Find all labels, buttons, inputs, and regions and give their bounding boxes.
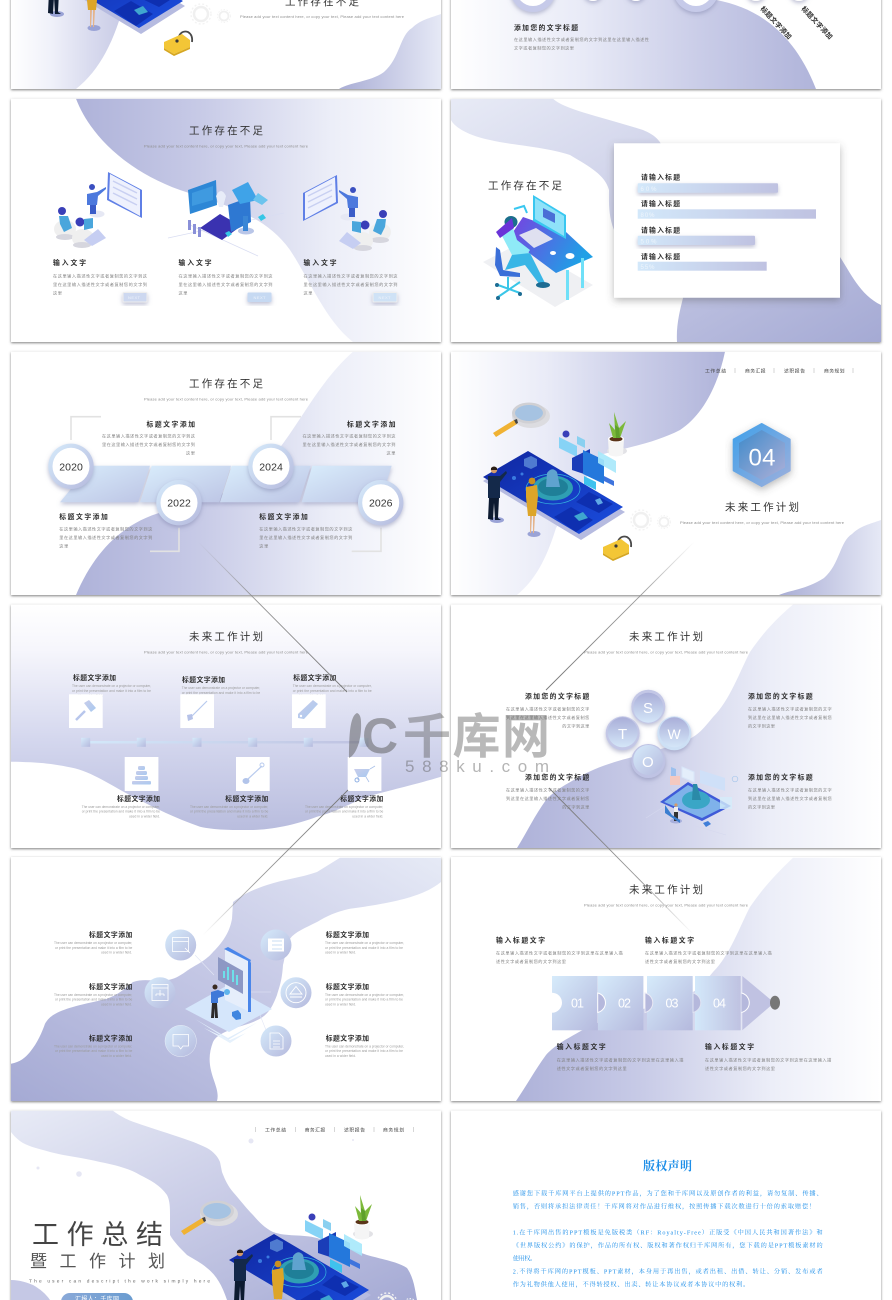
panel: slide circles and titles fragment <box>451 0 881 89</box>
text bottom left: 的文字到这里 <box>562 804 589 810</box>
button: NEXT: NEXT <box>254 295 266 300</box>
panel: slide hub with six icons <box>11 857 441 1101</box>
text: top left: 这里 <box>186 450 195 456</box>
item 4: cone <box>82 757 160 818</box>
icon: saw <box>298 700 318 719</box>
rotated label 2: 标题文字添加 <box>800 4 835 41</box>
text right 3: 标题文字添加 <box>326 1034 369 1042</box>
SWOT cluster: S <box>643 700 653 717</box>
item 6: wheelbarrow: The user can demonstrate on a projector or computer, <box>305 805 383 809</box>
text right 2 <box>325 982 404 1006</box>
item 3: saw: used in a wider field. <box>293 694 324 698</box>
column 2 text: 在这里输入描述性文字或者复制您的文字到这 <box>178 272 273 280</box>
text: top left: 在这里输入描述性文字或者复制您的文字到这 <box>102 432 196 440</box>
panel: slide 工作存在不足 three columns <box>11 99 441 342</box>
panel: slide chapter cover fragment <box>11 0 441 89</box>
text left 3: 标题文字添加 <box>89 1034 133 1042</box>
column 3 text: 在这里输入描述性文字或者复制您的文字到这 <box>304 272 398 280</box>
SWOT cluster: O <box>642 754 654 771</box>
pencil tip <box>742 976 780 1030</box>
item 4: cone: 标题文字添加 <box>117 794 160 803</box>
subtitle: Please add your text content here, or copy your text, Please add your text content here <box>584 903 749 908</box>
text left 1: used in a wider field. <box>101 950 132 954</box>
text left 2: 标题文字添加 <box>89 982 133 991</box>
hexagon badge 04 <box>734 424 790 486</box>
panel: copyright notice <box>451 1110 881 1300</box>
item 2: trowel: or print the presentation and make it into a film to be <box>182 691 260 695</box>
text right 1: 标题文字添加 <box>326 930 369 939</box>
text left 1: or print the presentation and make it into a film to be <box>55 946 132 950</box>
bar 80%: 80% <box>640 213 655 219</box>
illustration: rocket and dashboards <box>168 180 268 256</box>
text left 2: used in a wider field. <box>101 1002 132 1006</box>
panel: slide 工作存在不足 timeline <box>11 352 441 595</box>
text bottom left: 到这里在这里输入描述性文字或者复制您 <box>506 795 589 802</box>
navigation: 述职报告 <box>344 1126 365 1134</box>
item 4: cone: or print the presentation and make it into a film to be <box>82 810 160 814</box>
text top 2 <box>645 936 772 965</box>
panel: slide 未来工作计划 tools timeline <box>11 604 441 848</box>
navigation: 商务规划 <box>383 1126 404 1134</box>
text: top left: 里在这里输入描述性文字或者复制您的文字到 <box>102 441 195 448</box>
text top 1: 述性文字或者复制您的文字到这里 <box>496 958 566 965</box>
node 2020: 2020 <box>59 461 83 473</box>
item 3: saw: The user can demonstrate on a projector or computer, <box>293 684 372 688</box>
item 6: wheelbarrow: 标题文字添加 <box>340 794 384 803</box>
item 5: shovel: The user can demonstrate on a projector or computer, <box>190 805 268 809</box>
text top left: 的文字到这里 <box>562 722 589 730</box>
panel: slide 未来工作计划 SWOT <box>451 604 881 848</box>
text: top left <box>102 420 196 456</box>
item 1: roller: The user can demonstrate on a projector or computer, <box>72 684 151 688</box>
text: bottom left: 这里 <box>59 542 68 550</box>
item 5: shovel <box>190 757 270 818</box>
paragraph 3: 2.不得将千库网的PPT模板、PPT素材，本身用于再出售，或者出租、出借、转让、分销、发布或者 <box>513 1267 823 1275</box>
bar 60% <box>638 172 778 193</box>
SWOT cluster: W <box>668 726 682 742</box>
paragraph 1: 感谢您下载千库网平台上提供的PPT作品，为了您和千库网以及原创作者的利益，请勿复制、传播、 <box>513 1190 823 1198</box>
node 2024 <box>248 444 294 489</box>
bar 55% <box>638 252 767 271</box>
text block: 添加您的文字标题: 在这里输入描述性文字或者复制您的文字到这里在这里输入描述性 <box>514 36 649 43</box>
subtitle: Please add your text content here, or copy your text, Please add your text content here <box>144 144 309 148</box>
column 3 text: 输入文字 <box>304 258 337 267</box>
bar 80%: 请输入标题 <box>641 199 680 208</box>
column 2 text: 输入文字 <box>178 258 212 267</box>
column 2 text <box>178 258 273 302</box>
text: bottom left: 在这里输入描述性文字或者复制您的文字到这 <box>59 525 153 532</box>
item 1: roller: or print the presentation and make it into a film to be <box>72 689 151 693</box>
text top left: 添加您的文字标题 <box>525 692 590 700</box>
heading: 工作存在不足 <box>189 377 264 390</box>
navigation: 工作总结 <box>265 1126 286 1134</box>
watermark logo 千库网 588ku.com <box>349 708 550 776</box>
paragraph 2: 《世界版权公约》的保护，作品的所有权、版权和著作权归千库网所有，您下载的是PPT模板素材的 <box>513 1241 823 1249</box>
paragraph 2: 使用权。 <box>513 1254 536 1262</box>
icon: trowel <box>187 701 207 721</box>
item 2: trowel <box>180 675 260 728</box>
item 2: trowel: The user can demonstrate on a projector or computer, <box>182 686 260 690</box>
watermark logo 千库网 588ku.com: 千库网 <box>403 711 550 764</box>
item 6: wheelbarrow <box>305 757 384 818</box>
bar 55%: 请输入标题 <box>641 252 680 261</box>
brackets <box>71 417 381 551</box>
text: top right <box>302 420 396 456</box>
item 3: saw: or print the presentation and make it into a film to be <box>293 689 372 693</box>
bar 60%: 60% <box>640 187 657 193</box>
card: progress bars <box>614 143 840 298</box>
text left 2: or print the presentation and make it into a film to be <box>55 998 132 1002</box>
text bottom 2: 述性文字或者复制您的文字到这里 <box>705 1065 775 1072</box>
piece 04 <box>693 976 741 1030</box>
item 3: saw: 标题文字添加 <box>293 673 337 682</box>
text bottom right <box>748 772 832 810</box>
item 1: roller: used in a wider field. <box>72 694 103 698</box>
piece 01 <box>542 976 598 1030</box>
column 3 text <box>304 258 398 302</box>
text right 1 <box>325 930 404 954</box>
text top 2: 在这里输入描述性文字或者复制您的文字到这里在这里输入描 <box>645 950 772 956</box>
text bottom right: 在这里输入描述性文字或者复制您的文字 <box>748 786 832 794</box>
rotated label 1: 标题文字添加 <box>759 4 794 41</box>
text top left <box>506 692 590 730</box>
text right 2: The user can demonstrate on a projector or computer, <box>325 993 404 997</box>
text right 1: The user can demonstrate on a projector or computer, <box>325 941 404 945</box>
paragraph 1 <box>513 1190 823 1210</box>
paragraph 1: 销售，否则将承担法律责任！千库网将对作品进行维权，按照传播下载次数进行十倍的索取赔偿！ <box>513 1202 815 1210</box>
item 4: cone: used in a wider field. <box>129 814 160 818</box>
column 3 text: 里在这里输入描述性文字或者复制您的文字到 <box>304 281 398 288</box>
icon node: org chart <box>144 977 176 1008</box>
column 1 text <box>53 258 148 302</box>
text bottom 2 <box>705 1042 831 1072</box>
panel: slide title cover 工作总结 <box>11 1110 441 1300</box>
secondary title: 暨工作计划 <box>30 1252 165 1271</box>
icon: padlock <box>603 536 631 561</box>
watermark diagonal lines <box>198 542 694 935</box>
text top 2: 输入标题文字 <box>645 936 694 944</box>
text block: 添加您的文字标题: 添加您的文字标题 <box>514 23 578 32</box>
main title: 工作总结 <box>32 1220 163 1250</box>
illustration: presenters left <box>54 172 142 248</box>
text bottom 2: 在这里输入描述性文字或者复制您的文字到这里在这里输入描 <box>705 1056 831 1063</box>
text left 3: The user can demonstrate on a projector or computer, <box>54 1044 132 1048</box>
column 1 text: 这里 <box>53 289 62 296</box>
text top right: 到这里在这里输入描述性文字或者复制您 <box>748 714 832 721</box>
item 3: saw <box>292 673 372 728</box>
node 2026: 2026 <box>369 498 393 510</box>
text bottom 1 <box>557 1042 683 1072</box>
navigation: 商务规划 <box>824 368 845 374</box>
bar 80% <box>638 199 816 219</box>
text bottom 1: 输入标题文字 <box>557 1042 606 1051</box>
heading: 未来工作计划 <box>189 630 263 643</box>
panel: slide 工作存在不足 bars <box>451 99 881 342</box>
text: top right: 标题文字添加 <box>347 420 396 428</box>
navigation <box>705 368 853 374</box>
text top 2: 述性文字或者复制您的文字到这里 <box>645 958 715 965</box>
navigation: 述职报告 <box>784 368 805 374</box>
SWOT cluster <box>606 690 691 778</box>
node 2026 <box>358 480 403 525</box>
text left 3: or print the presentation and make it into a film to be <box>55 1049 132 1053</box>
paragraph 3 <box>513 1267 823 1288</box>
icon node: document <box>260 1026 292 1056</box>
illustration: isometric phone dashboard <box>483 412 670 540</box>
text bottom right: 的文字到这里 <box>748 804 775 810</box>
navigation <box>256 1126 413 1134</box>
item 1: roller <box>69 673 151 728</box>
text top right: 在这里输入描述性文字或者复制您的文字 <box>748 706 832 712</box>
text bottom left: 添加您的文字标题 <box>525 772 590 782</box>
text right 2: or print the presentation and make it into a film to be <box>325 998 403 1002</box>
watermark logo 千库网 588ku.com: C <box>362 708 398 764</box>
illustration: person at desk <box>483 195 593 307</box>
timeline bands <box>60 466 392 502</box>
tagline: The user can descript the work simply here <box>29 1278 210 1284</box>
bar 55%: 55% <box>640 265 655 271</box>
piece 03: 03 <box>666 996 679 1010</box>
illustration: tablet chart and person <box>185 947 272 1043</box>
text top right <box>748 692 832 730</box>
text bottom right: 添加您的文字标题 <box>748 772 813 782</box>
text right 3 <box>325 1034 404 1058</box>
text bottom left <box>506 772 590 810</box>
text right 2: 标题文字添加 <box>326 982 369 991</box>
node 2022 <box>156 480 202 525</box>
navigation: 商务汇报 <box>305 1126 325 1134</box>
text bottom left: 在这里输入描述性文字或者复制您的文字 <box>506 786 589 794</box>
column 1 text: 输入文字 <box>53 258 86 267</box>
text right 2: used in a wider field. <box>325 1002 356 1006</box>
illustration: isometric phone dashboard <box>43 0 230 34</box>
text block: 添加您的文字标题 <box>514 23 649 52</box>
text: top right: 这里 <box>386 450 396 456</box>
text: bottom right: 标题文字添加 <box>259 512 308 521</box>
paragraph 2 <box>513 1228 823 1262</box>
node 2020 <box>48 444 94 489</box>
item 6: wheelbarrow: used in a wider field. <box>352 814 383 818</box>
piece 02 <box>598 976 643 1030</box>
icon: magnifier <box>493 402 550 437</box>
text top left: 在这里输入描述性文字或者复制您的文字 <box>506 706 589 712</box>
text left 1 <box>54 930 133 954</box>
text: top right: 在这里输入描述性文字或者复制您的文字到这 <box>302 432 396 440</box>
piece 03 <box>645 976 693 1030</box>
text right 3: or print the presentation and make it into a film to be <box>325 1049 403 1053</box>
text right 3: The user can demonstrate on a projector or computer, <box>325 1044 404 1048</box>
icon node: eject triangle <box>280 977 312 1008</box>
icon node: browser cursor <box>165 930 196 960</box>
text top left: 到这里在这里输入描述性文字或者复制您 <box>506 714 589 721</box>
circle nodes <box>510 0 809 12</box>
bar 50% <box>638 226 755 246</box>
icon: padlock <box>164 32 192 56</box>
piece 01: 01 <box>571 996 584 1010</box>
piece 02: 02 <box>618 996 631 1010</box>
text left 3 <box>54 1034 133 1058</box>
hexagon badge 04: 04 <box>748 444 776 472</box>
decorative dots <box>36 1138 354 1177</box>
item 2: trowel: 标题文字添加 <box>182 675 225 684</box>
item 1: roller: 标题文字添加 <box>73 673 116 682</box>
heading: 工作存在不足 <box>189 124 264 137</box>
text right 1: used in a wider field. <box>325 950 356 954</box>
item 5: shovel: 标题文字添加 <box>225 794 269 803</box>
text top right: 的文字到这里 <box>748 722 775 730</box>
heading: 未来工作计划 <box>629 883 703 896</box>
item 2: trowel: used in a wider field. <box>182 696 213 700</box>
node 2024: 2024 <box>259 461 283 473</box>
text top 1: 在这里输入描述性文字或者复制您的文字到这里在这里输入描 <box>496 950 623 956</box>
axis line with nodes <box>81 738 368 747</box>
text left 1: The user can demonstrate on a projector or computer, <box>54 941 132 945</box>
icon: wheelbarrow <box>354 766 375 782</box>
icon: paint roller <box>76 700 96 720</box>
text top 1 <box>496 936 623 965</box>
text bottom 1: 在这里输入描述性文字或者复制您的文字到这里在这里输入描 <box>557 1056 683 1063</box>
puzzle pencil <box>542 976 780 1030</box>
text top 1: 输入标题文字 <box>496 936 545 944</box>
navigation: 商务汇报 <box>745 368 766 374</box>
bar 50%: 请输入标题 <box>641 226 680 234</box>
paragraph 3: 作为礼物供他人使用，不得转授权、出卖、转让本协议或者本协议中的权利。 <box>513 1280 749 1288</box>
text: bottom right: 里在这里输入描述性文字或者复制您的文字到 <box>259 534 352 541</box>
icon: stacked cone <box>132 766 151 784</box>
node 2022: 2022 <box>167 498 191 510</box>
text bottom 1: 述性文字或者复制您的文字到这里 <box>557 1065 627 1072</box>
text left 2: The user can demonstrate on a projector or computer, <box>54 993 132 997</box>
icon node: speech bubble <box>165 1025 196 1057</box>
bar 50%: 50% <box>640 240 657 246</box>
column 2 text: 这里 <box>178 289 188 296</box>
text: bottom right: 这里 <box>259 542 268 550</box>
text: top left: 标题文字添加 <box>146 420 195 428</box>
subtitle: Please add your text content here, or copy your text, Please add your text content here <box>584 650 749 654</box>
subtitle: Please add your text content here, or copy your text, Please add your text content here <box>144 396 309 402</box>
icon: magnifier <box>181 1200 238 1235</box>
text: bottom left <box>59 512 153 550</box>
text: bottom left: 里在这里输入描述性文字或者复制您的文字到 <box>59 534 152 541</box>
panel: slide 04 未来工作计划 section cover <box>451 352 881 595</box>
heading: 未来工作计划 <box>629 630 703 643</box>
panel: slide 未来工作计划 puzzle pencil <box>451 857 881 1101</box>
text left 3: used in a wider field. <box>101 1054 132 1058</box>
text left 2 <box>54 982 133 1006</box>
heading: 版权声明: 版权声明 <box>643 1158 692 1173</box>
column 1 text: 在这里输入描述性文字或者复制您的文字到这 <box>53 272 148 280</box>
item 4: cone: The user can demonstrate on a projector or computer, <box>82 805 160 809</box>
column 1 text: 里在这里输入描述性文字或者复制您的文字到 <box>53 281 147 288</box>
button: NEXT: NEXT <box>378 295 391 300</box>
text: top right: 里在这里输入描述性文字或者复制您的文字到 <box>302 441 396 448</box>
text top right: 添加您的文字标题 <box>748 692 813 700</box>
subtitle: Please add your text content here, or copy your text, Please add your text content here <box>144 650 309 654</box>
illustration: presenters right <box>303 175 391 251</box>
heading: 工作存在不足 <box>488 179 562 192</box>
navigation: 工作总结 <box>705 368 726 374</box>
SWOT cluster: T <box>618 726 627 743</box>
watermark logo 千库网 588ku.com: 588ku.com <box>405 757 549 776</box>
item 5: shovel: or print the presentation and make it into a film to be <box>190 810 268 814</box>
piece 04: 04 <box>713 996 726 1010</box>
icon node: list <box>260 930 292 960</box>
text right 1: or print the presentation and make it into a film to be <box>325 946 403 950</box>
text: bottom right: 在这里输入描述性文字或者复制您的文字到这 <box>259 525 353 532</box>
illustration: phone and person <box>646 767 738 835</box>
heading: 未来工作计划 <box>725 500 799 514</box>
text: bottom right <box>259 512 353 550</box>
illustration: isometric phone dashboard <box>229 1195 416 1300</box>
button: reporter <box>61 1293 133 1300</box>
item 6: wheelbarrow: or print the presentation and make it into a film to be <box>305 810 383 814</box>
text right 3: used in a wider field. <box>325 1054 356 1058</box>
subtitle: Please add your text content here, or copy your text, Please add your text content here <box>680 520 845 525</box>
text: bottom left: 标题文字添加 <box>59 512 108 521</box>
column 3 text: 这里 <box>304 289 312 296</box>
subtitle: Please add your text content here, or copy your text, Please add your text content here <box>240 14 405 19</box>
text bottom 2: 输入标题文字 <box>705 1042 754 1051</box>
text block: 添加您的文字标题: 文字或者复制您的文字到这里 <box>514 44 574 52</box>
text bottom right: 到这里在这里输入描述性文字或者复制您 <box>748 795 832 802</box>
paragraph 2: 1.在千库网出售的PPT模板是免版税类（RF：Royalty-Free）正版受《中国人民共和国著作法》和 <box>513 1228 823 1236</box>
text left 1: 标题文字添加 <box>89 930 133 939</box>
bar 60%: 请输入标题 <box>641 172 680 182</box>
icon: shovel <box>242 763 264 784</box>
button: NEXT: NEXT <box>128 295 141 300</box>
column 2 text: 里在这里输入描述性文字或者复制您的文字到 <box>178 281 272 288</box>
item 5: shovel: used in a wider field. <box>237 814 268 818</box>
